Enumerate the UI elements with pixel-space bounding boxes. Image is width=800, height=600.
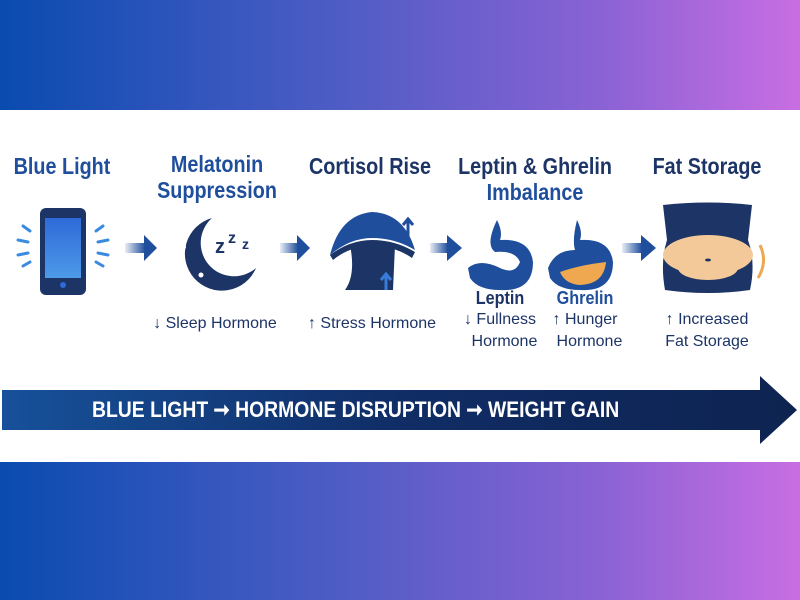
heading: Leptin & Ghrelin Imbalance [458,153,612,205]
heading: Leptin & Ghrelin Imbalance: Leptin & Ghrelin [458,153,612,179]
text: leptin label: ↓ Fullness [464,311,536,328]
arrow 2 [280,235,310,261]
heading: Melatonin Suppression [157,151,277,203]
heading: Cortisol Rise: Cortisol Rise [309,153,431,179]
text: ghrelin label: Ghrelin [557,288,613,308]
arrow 1 [125,235,157,261]
text: increased fat storage [665,311,749,350]
icon: moon with zzz [182,218,256,291]
text: ghrelin label: ↑ Hunger [553,311,617,328]
heading: Leptin & Ghrelin Imbalance: Imbalance [487,179,583,205]
banner text: BLUE LIGHT ➞ HORMONE DISRUPTION ➞ WEIGHT GAIN [92,397,619,422]
heading: Fat Storage: Fat Storage [653,153,761,179]
icon: cortisol mushroom [330,212,415,290]
text: leptin label: Hormone [472,333,537,350]
icon: moon with zzz: z [242,236,249,252]
icon: belly [663,202,764,293]
heading: Blue Light: Blue Light [14,153,110,179]
icon: moon with zzz: z [228,230,236,247]
banner arrow [2,376,797,444]
text: increased fat storage: ↑ Increased [666,311,748,328]
text: stress hormone: ↑ Stress Hormone [308,315,436,332]
text: increased fat storage: Fat Storage [665,333,749,350]
text: sleep hormone: ↓ Sleep Hormone [153,315,277,332]
text: leptin label: Leptin [476,288,524,308]
arrow 3 [430,235,462,261]
icon: ghrelin stomach [548,220,613,290]
arrow 4 [622,235,656,261]
top gradient band [0,0,800,110]
icon: phone [18,208,108,295]
heading: Melatonin Suppression: Suppression [157,177,277,203]
bottom gradient band [0,462,800,600]
heading: Melatonin Suppression: Melatonin [171,151,263,177]
icon: leptin stomach [468,220,533,290]
text: ghrelin label [553,288,622,350]
text: leptin label [464,288,537,350]
text: ghrelin label: Hormone [557,333,622,350]
icon: moon with zzz: z [215,236,225,258]
